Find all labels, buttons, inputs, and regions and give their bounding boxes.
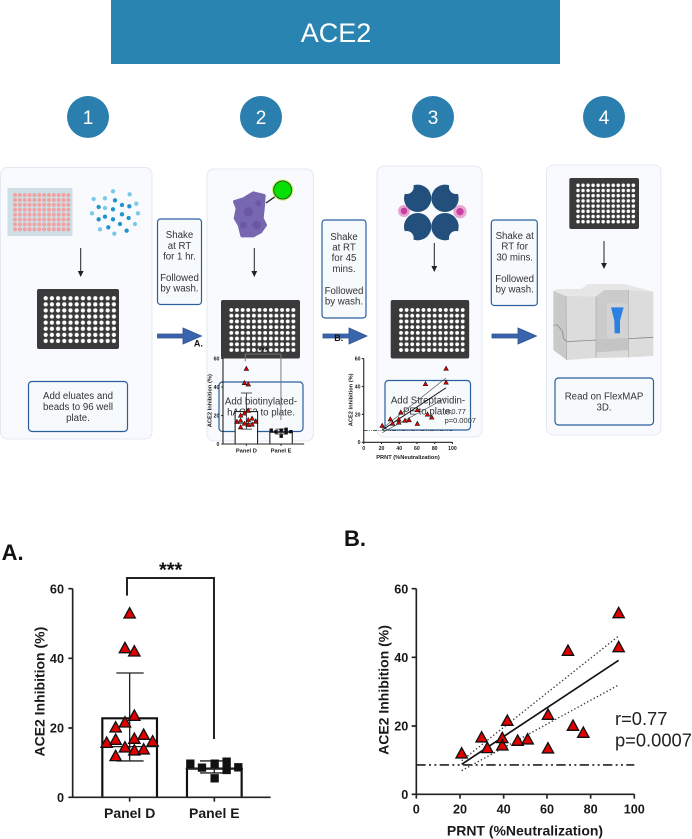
mini scatter chart overlay: 20 (355, 412, 361, 418)
mini bar chart overlay: Panel E (271, 448, 292, 454)
mini bar chart overlay: 20 (214, 413, 220, 419)
x labels: Panel E (189, 805, 240, 821)
text box: step 2: hACE2 to plate. (227, 408, 295, 418)
step number 1 (67, 96, 109, 138)
cutoff line (416, 762, 634, 767)
text box: step 3: Add Streptavidin- (391, 396, 465, 406)
significance bracket (127, 560, 214, 739)
mini scatter chart overlay: 60 (355, 356, 361, 362)
callout: shake 45 mins: Shake (330, 232, 358, 243)
y tick labels: 60 (394, 582, 408, 596)
y tick labels (50, 582, 64, 805)
panel: step 1 (0, 168, 152, 439)
text box: step 4: Read on FlexMAP (565, 392, 643, 402)
text box: step 2 (219, 382, 303, 432)
callout: shake 30 mins: 30 mins. (496, 252, 533, 264)
x tick labels: 20 (453, 802, 467, 816)
callout: shake 45 mins: for 45 (332, 253, 356, 264)
x tick labels: 0 (413, 802, 420, 816)
data points (456, 607, 624, 758)
step number 3 (412, 96, 454, 138)
mini bar chart overlay: *** (258, 347, 269, 356)
icon: black 96 well plate (37, 289, 119, 349)
callout: shake 45 mins: at RT (332, 242, 356, 254)
mini scatter chart overlay: 60 (414, 446, 420, 452)
arrow: down (431, 243, 437, 272)
x axis label: PRNT (%Neutralization) (447, 822, 603, 838)
y tick labels: 20 (394, 720, 408, 734)
y tick labels: 60 (50, 582, 64, 596)
text box: step 3: PE to plate. (403, 406, 453, 418)
mini scatter chart overlay: 40 (396, 446, 402, 452)
x tick labels (413, 802, 645, 816)
callout: shake 30 mins (491, 220, 537, 306)
callout: shake 1 hr (158, 219, 202, 304)
correlation stats: p=0.0007 (615, 730, 692, 751)
bar chart A: ACE2 inhibition by panel (2, 540, 271, 821)
step number 2 (240, 96, 282, 138)
callout: shake 1 hr: at RT (168, 241, 191, 252)
mini bar chart overlay: A. (194, 339, 203, 349)
axes (412, 589, 634, 799)
step number 4 (583, 96, 625, 138)
y axis label: ACE2 Inhibition (%) (32, 627, 48, 757)
y tick labels: 0 (401, 788, 408, 802)
icon: streptavidin-PE (398, 180, 467, 245)
callout: shake 30 mins: Shake at (496, 231, 534, 242)
x tick labels: 40 (497, 802, 511, 816)
icon: pink sample plate (8, 188, 72, 236)
arrow: step 2 to 3 (323, 328, 367, 344)
arrow: down (78, 248, 84, 277)
panel: step 4 (546, 165, 661, 435)
text box: step 1: Add eluates and (43, 391, 113, 402)
mini scatter chart overlay: p=0.0007 (445, 416, 476, 425)
text box: step 1 (28, 382, 128, 432)
callout: shake 1 hr: by wash. (160, 284, 199, 294)
panel: step 2 (207, 169, 314, 441)
step number 1: 1 (83, 108, 93, 129)
panel: step 3 (377, 166, 482, 437)
y tick labels: 0 (57, 791, 64, 805)
step number 3: 3 (428, 108, 438, 129)
arrow: down (601, 241, 607, 269)
Panel D points (101, 608, 158, 761)
mini scatter chart overlay: ACE2 Inhibition (%) (348, 373, 354, 426)
Panel E points (186, 757, 242, 782)
y axis label: ACE2 Inhibition (%) (375, 625, 391, 755)
scatter chart B: ACE2 inhibition vs PRNT (344, 526, 692, 838)
text box: step 1: plate. (66, 413, 90, 424)
text box: step 4 (555, 378, 654, 425)
text box: step 4: 3D. (596, 402, 612, 414)
title banner: ACE2 (301, 18, 371, 48)
y tick labels: 40 (50, 652, 64, 666)
mini bar chart overlay: 60 (214, 356, 220, 362)
icon: black 96 well plate (569, 178, 639, 229)
x labels: Panel D (104, 805, 155, 821)
x tick labels: 80 (584, 802, 598, 816)
mini scatter chart overlay: 0 (358, 440, 361, 446)
callout: shake 1 hr: Followed (160, 273, 199, 284)
icon: beads (90, 189, 140, 236)
axes (68, 589, 271, 802)
correlation stats (615, 708, 692, 751)
icon: biotinylated hACE2 protein (235, 179, 293, 236)
x tick labels: 100 (624, 802, 645, 816)
panel label B: B. (344, 526, 366, 551)
callout: shake 30 mins: RT for (501, 242, 529, 252)
mini scatter chart overlay: 100 (448, 446, 457, 452)
x labels (104, 805, 240, 821)
confidence bands (462, 636, 619, 771)
icon: black 96 well plate (391, 300, 469, 358)
regression line (462, 660, 619, 764)
panel label A: A. (2, 540, 24, 565)
icon: FlexMAP 3D instrument (553, 284, 653, 360)
mini scatter chart overlay: 40 (355, 384, 361, 390)
mini bar chart overlay (194, 339, 304, 454)
correlation stats: r=0.77 (615, 708, 667, 729)
mini bar chart overlay: ACE2 Inhibition (%) (208, 374, 214, 427)
callout: shake 45 mins: mins. (332, 264, 356, 275)
mini scatter chart overlay: 20 (379, 446, 385, 452)
mini scatter chart overlay: r=0.77 (445, 407, 466, 416)
callout: shake 45 mins (322, 220, 366, 318)
title banner (111, 0, 560, 64)
text box: step 3 (385, 380, 470, 430)
mini scatter chart overlay: B. (334, 333, 343, 343)
text box: step 2: Add biotinylated- (225, 396, 297, 408)
mini bar chart overlay: 40 (214, 385, 220, 391)
y tick labels: 20 (50, 722, 64, 736)
y tick labels: 40 (394, 651, 408, 665)
y tick labels (394, 582, 408, 802)
mini scatter chart overlay: PRNT (%Neutralization) (376, 455, 440, 461)
step number 4: 4 (599, 108, 610, 129)
arrow: down (251, 248, 257, 277)
callout: shake 30 mins: by wash. (496, 284, 534, 296)
significance bracket: *** (159, 560, 183, 582)
text box: step 1: beads to 96 well (43, 402, 113, 413)
callout: shake 30 mins: Followed (495, 274, 534, 285)
mini scatter chart overlay (334, 333, 476, 461)
callout: shake 45 mins: by wash. (325, 296, 363, 308)
icon: black 96 well plate (221, 300, 300, 358)
callout: shake 45 mins: Followed (325, 286, 363, 297)
callout: shake 1 hr: Shake (166, 230, 193, 241)
x tick labels: 60 (540, 802, 554, 816)
bars (102, 718, 242, 797)
mini scatter chart overlay: 80 (432, 446, 438, 452)
callout: shake 1 hr: for 1 hr. (163, 252, 196, 262)
mini scatter chart overlay: 0 (362, 446, 365, 452)
arrow: step 1 to 2 (158, 328, 202, 344)
error bars (101, 673, 243, 773)
step number 2: 2 (256, 108, 266, 129)
mini bar chart overlay: Panel D (236, 448, 257, 454)
mini bar chart overlay: 0 (217, 442, 220, 448)
arrow: step 3 to 4 (492, 328, 536, 344)
